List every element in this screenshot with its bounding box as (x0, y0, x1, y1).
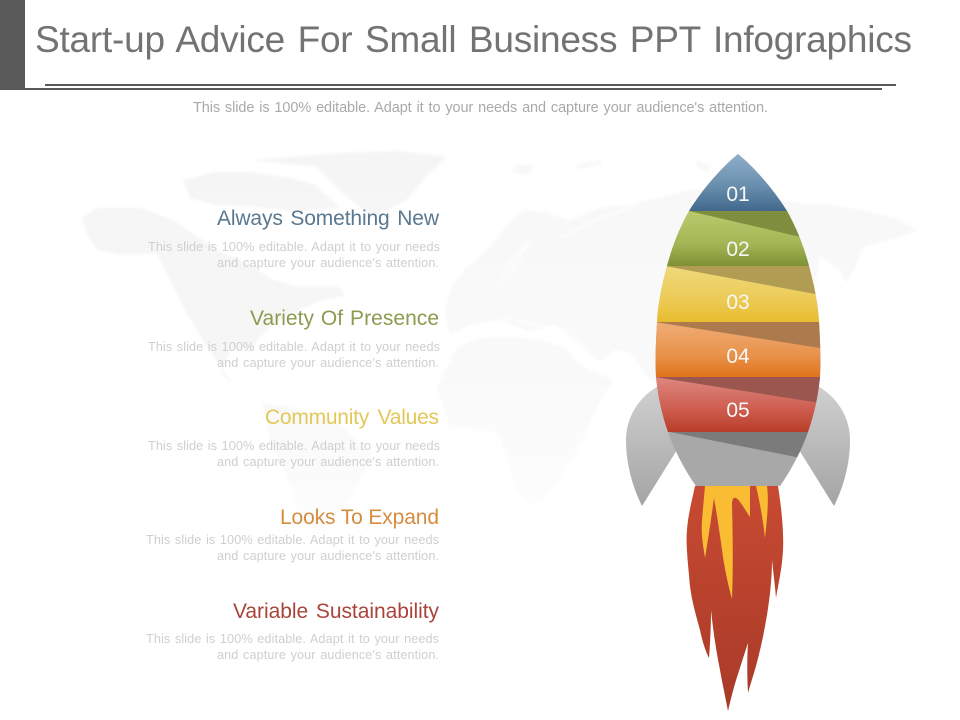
item 3: community values: This slide is 100% editable. Adapt it to your needs (148, 439, 440, 453)
item 4: looks to expand: and capture your audience's attention. (217, 549, 439, 563)
world map watermark (82, 151, 920, 535)
label 03: 03 (726, 291, 750, 314)
icon: right fin (796, 385, 850, 506)
title: Start-up Advice For Small Business PPT Infographics (35, 19, 912, 60)
item 1: always something new: and capture your audience's attention. (217, 256, 439, 270)
item 3: community values (148, 406, 440, 469)
item 1: always something new (148, 207, 440, 270)
panel: advice list (146, 207, 440, 662)
rocket (626, 150, 850, 711)
item 5: variable sustainability: Variable Sustainability (233, 600, 440, 623)
item 2: variety of presence (148, 307, 440, 370)
header block (0, 0, 896, 90)
item 2: variety of presence: and capture your audience's attention. (217, 356, 439, 370)
item 4: looks to expand (146, 506, 439, 563)
item 3: community values: and capture your audience's attention. (217, 455, 439, 469)
label 04: 04 (726, 345, 750, 368)
item 4: looks to expand: This slide is 100% editable. Adapt it to your needs (146, 533, 439, 547)
item 2: variety of presence: Variety Of Presence (250, 307, 439, 330)
item 1: always something new: Always Something New (217, 207, 440, 230)
item 5: variable sustainability: and capture your audience's attention. (217, 648, 439, 662)
label 05: 05 (726, 399, 750, 422)
rocket body with coloured bands (650, 150, 826, 490)
item 3: community values: Community Values (265, 406, 439, 429)
item 4: looks to expand: Looks To Expand (280, 506, 439, 529)
item 1: always something new: This slide is 100% editable. Adapt it to your needs (148, 240, 440, 254)
item 5: variable sustainability: This slide is 100% editable. Adapt it to your needs (146, 632, 439, 646)
item 2: variety of presence: This slide is 100% editable. Adapt it to your needs (148, 340, 440, 354)
label 01: 01 (726, 183, 750, 206)
label 02: 02 (726, 238, 750, 261)
icon: flame (687, 486, 783, 711)
subtitle: This slide is 100% editable. Adapt it to your needs and capture your audience's attention. (193, 100, 768, 116)
icon: left fin (626, 385, 680, 506)
item 5: variable sustainability (146, 600, 440, 662)
